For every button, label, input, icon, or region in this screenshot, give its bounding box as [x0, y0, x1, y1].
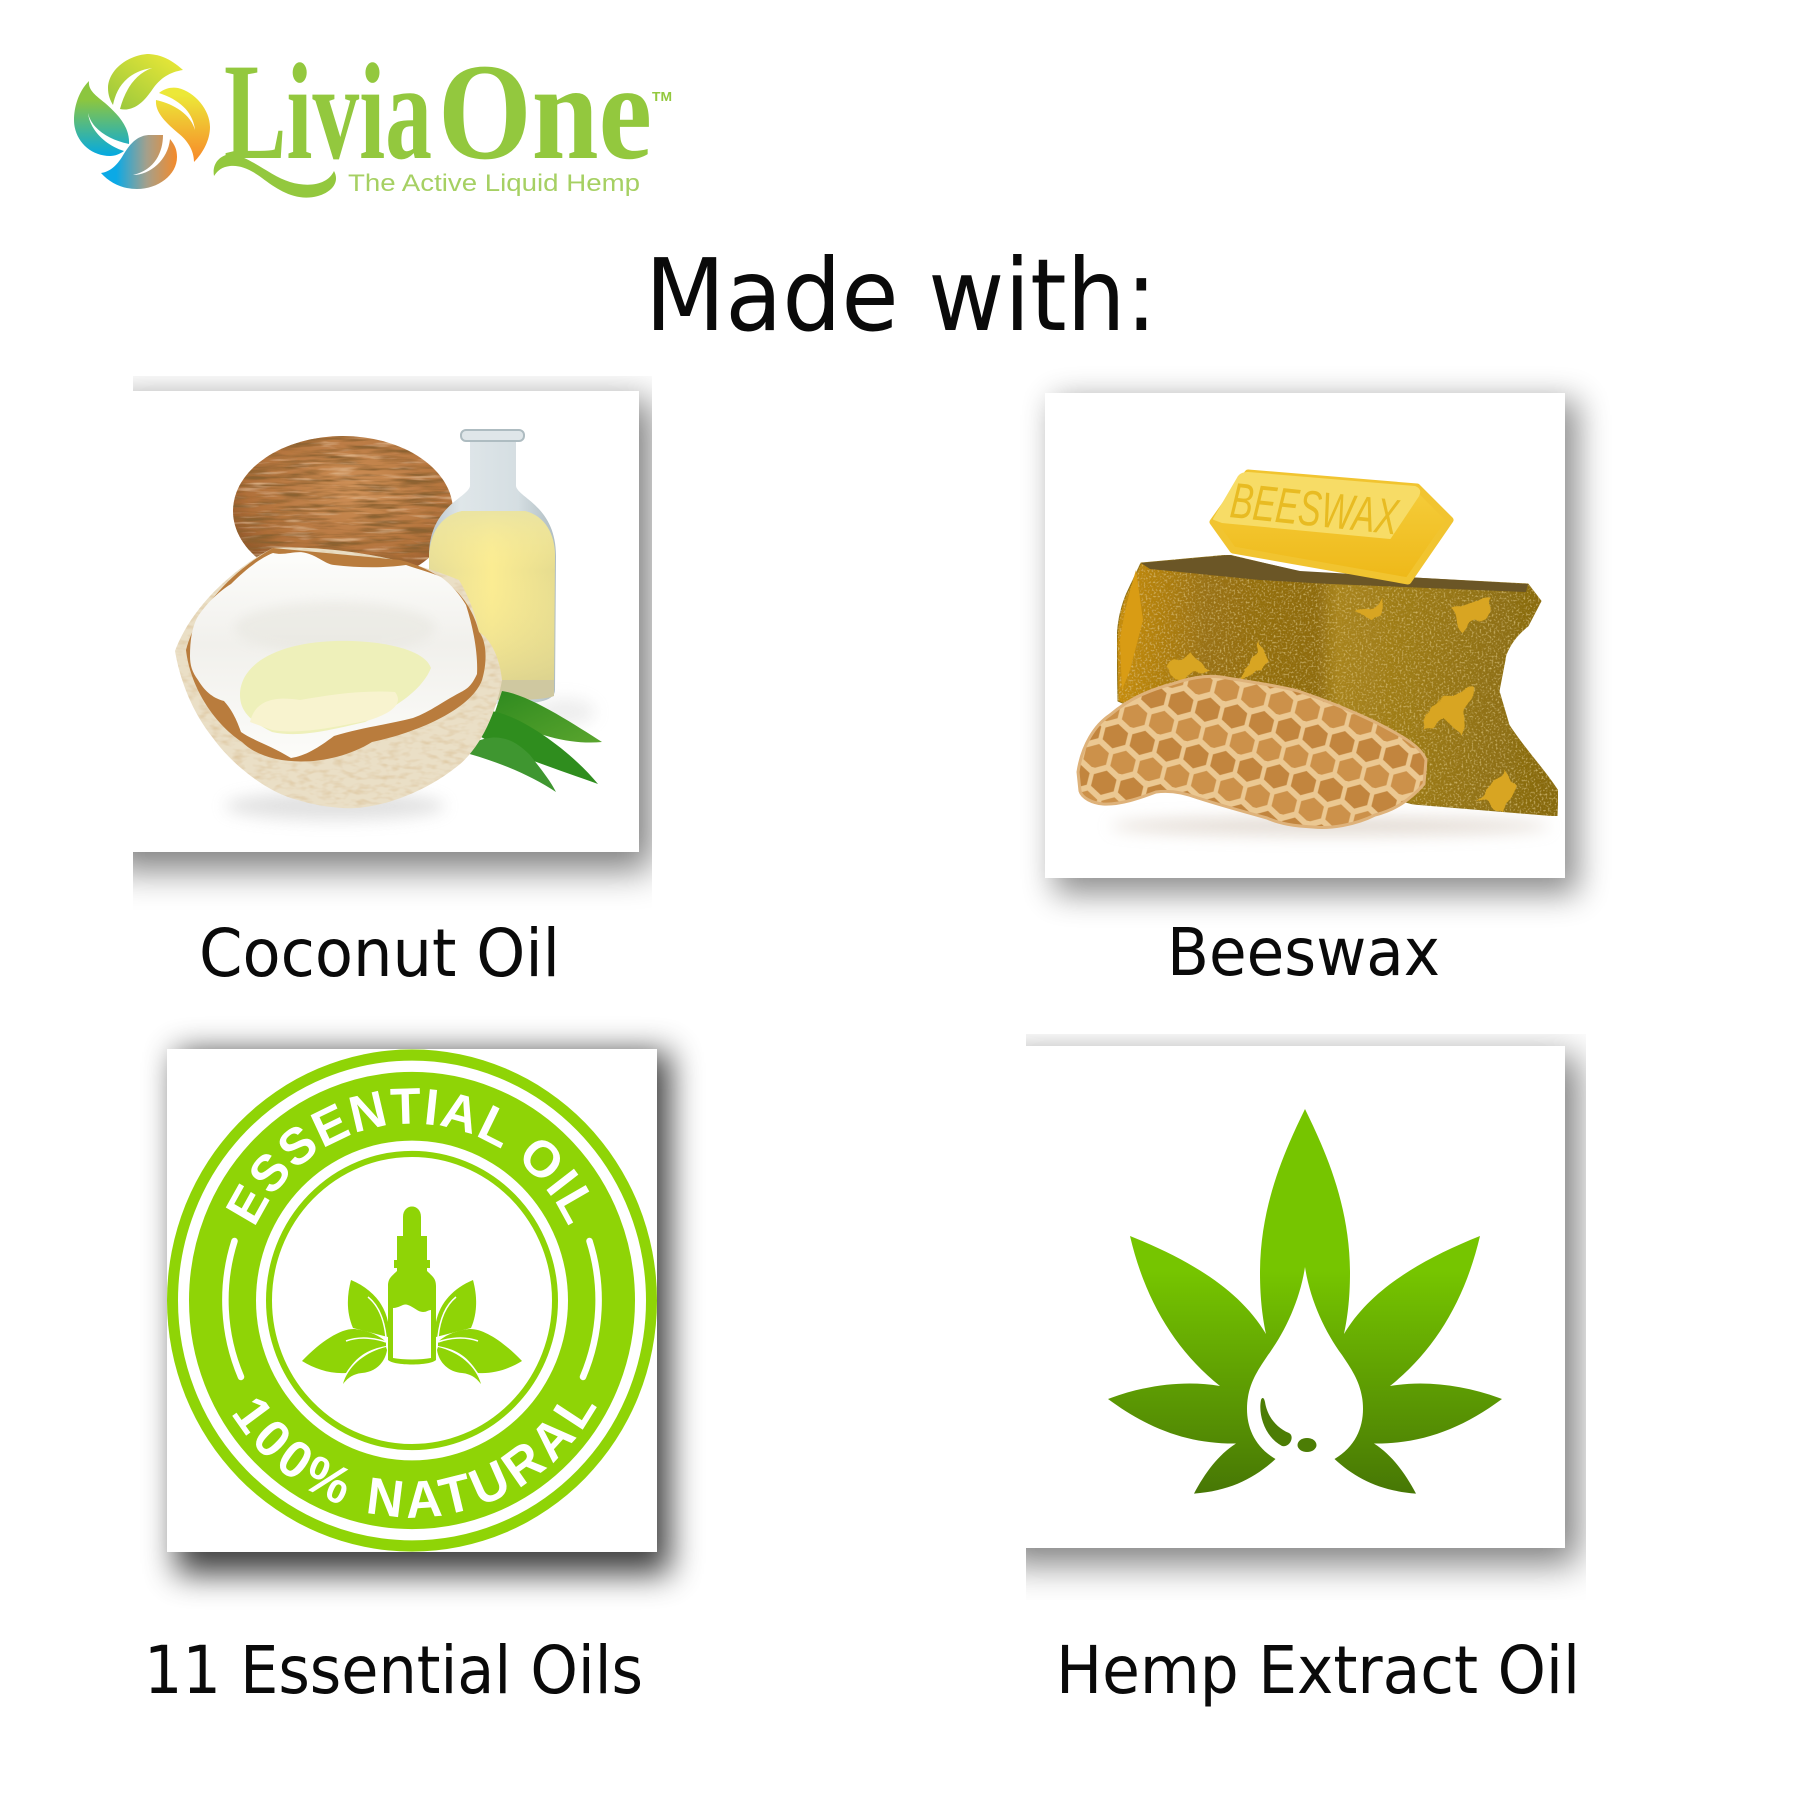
- logo wordmark: Livia: [224, 35, 432, 188]
- logo icon: four coloured leaves: [74, 54, 210, 189]
- card shadow: [1054, 400, 1578, 894]
- card shadow: [1000, 1056, 1578, 1564]
- beeswax bar: BEESWAX: [1228, 472, 1402, 546]
- icon: dropper bottle with leaves: [302, 1206, 522, 1384]
- logo wordmark: One: [438, 35, 652, 188]
- panel: beeswax: [1045, 393, 1578, 894]
- card shadow: [110, 400, 652, 870]
- card shadow: [176, 1052, 670, 1574]
- card: [167, 1049, 657, 1552]
- coconut oil pool: [240, 641, 431, 734]
- pandan leaves: [459, 691, 602, 792]
- oil bottle: [429, 430, 556, 704]
- card: [1026, 1046, 1565, 1548]
- badge rings: [167, 1049, 657, 1552]
- logo tagline: The Active Liquid Hemp: [348, 170, 640, 197]
- icon: hemp leaf with oil drop: [1108, 1109, 1502, 1494]
- label: essential oils: 11 Essential Oils: [144, 1632, 643, 1709]
- wax block: [1117, 555, 1558, 816]
- half coconut shell: [175, 547, 502, 808]
- honeycomb: [1078, 676, 1426, 828]
- badge: essential oil 100% natural: [167, 1049, 657, 1552]
- badge text bottom: 100% NATURAL: [232, 1398, 597, 1518]
- badge text top: ESSENTIAL OIL: [226, 1088, 590, 1226]
- wax streaks: [1170, 596, 1512, 808]
- logo wordmark: TM: [652, 89, 672, 104]
- panel: hemp extract oil: [1000, 1046, 1578, 1564]
- label: beeswax: Beeswax: [1167, 914, 1440, 991]
- panel: coconut oil: [110, 391, 652, 870]
- label: hemp extract oil: Hemp Extract Oil: [1056, 1632, 1580, 1709]
- card: [133, 391, 639, 852]
- whole coconut: [233, 436, 453, 586]
- label: coconut oil: Coconut Oil: [199, 915, 560, 992]
- heading: Made with:: [645, 237, 1157, 354]
- card: [1045, 393, 1565, 878]
- panel: essential oils: [150, 1026, 696, 1600]
- logo: LiviaOne: [74, 35, 672, 198]
- logo wordmark: [214, 35, 672, 198]
- photo: coconut, bottle and leaves: [175, 430, 602, 820]
- beeswax bar: [1213, 472, 1450, 581]
- coconut flesh: [190, 552, 477, 758]
- photo: beeswax block, bar and honeycomb: [1078, 472, 1558, 835]
